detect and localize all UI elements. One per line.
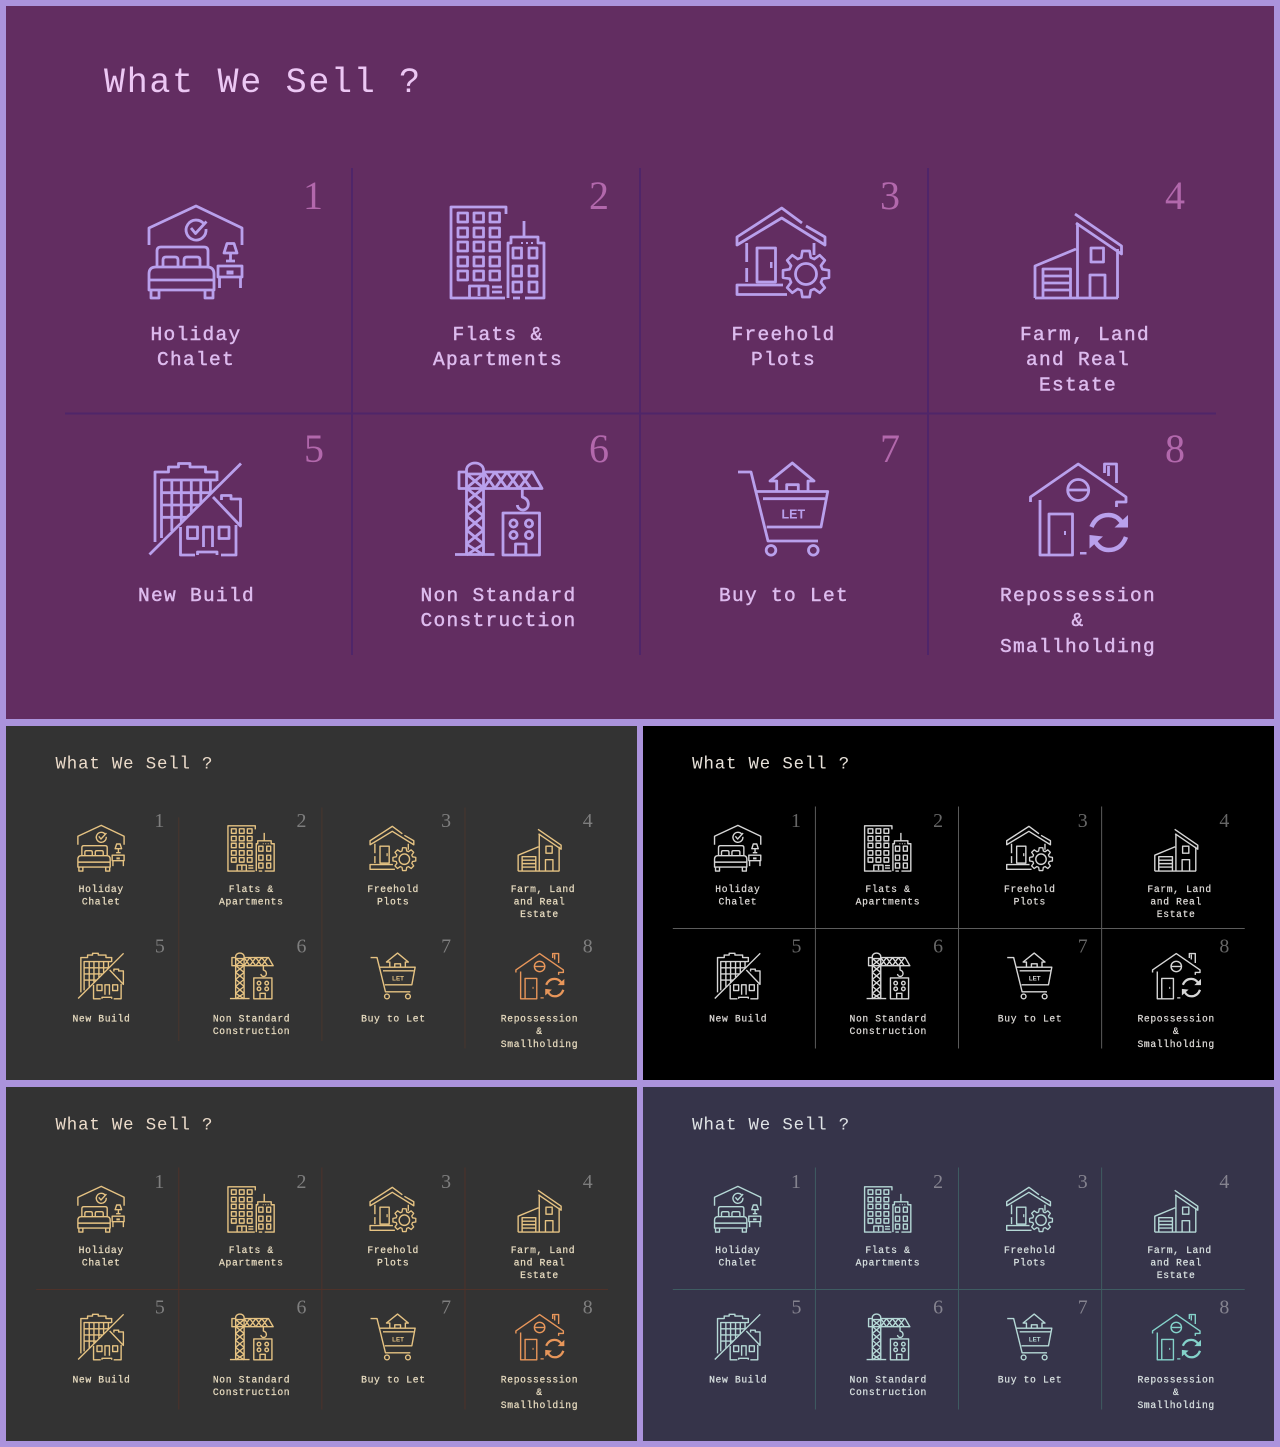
item 5: New Build: 5 [792, 1297, 802, 1319]
item 6: Non Standard Construction: Non Standard [420, 585, 577, 607]
item 8: Repossession & Smallholding: 8 [1219, 1297, 1229, 1319]
title: What We Sell ? [56, 756, 213, 775]
item 3: Freehold Plots: 3 [441, 810, 451, 832]
item 4: Farm, Land and Real Estate: Farm, Land [1147, 1245, 1212, 1256]
item 6: Non Standard Construction [850, 1297, 943, 1398]
item 8: Repossession & Smallholding: Repossession [1137, 1375, 1215, 1386]
item 2: Flats & Apartments: Apartments [219, 896, 284, 907]
item 2: Flats & Apartments: Apartments [856, 896, 920, 907]
item 6: Non Standard Construction [850, 936, 943, 1037]
item 5: New Build [72, 1297, 165, 1386]
item 8: Repossession & Smallholding [1137, 1297, 1229, 1411]
title: What We Sell ? [692, 756, 850, 775]
item 7: Buy to Let [719, 426, 900, 607]
item 3: Freehold Plots [1004, 810, 1088, 907]
item 5: New Build: 5 [155, 936, 165, 958]
item 4: Farm, Land and Real Estate: Estate [520, 909, 559, 920]
panel: charcoal slide, bottom left [6, 1087, 637, 1441]
item 4: Farm, Land and Real Estate: and Real [1150, 896, 1202, 907]
item 3: Freehold Plots: Freehold [1004, 884, 1056, 895]
item 7: Buy to Let: Buy to Let [361, 1375, 426, 1386]
item 6: Non Standard Construction [213, 936, 307, 1037]
item 6: Non Standard Construction: Non Standard [213, 1375, 290, 1386]
item 4: Farm, Land and Real Estate: Farm, Land [511, 884, 575, 895]
item 4: Farm, Land and Real Estate [1147, 1171, 1229, 1281]
panel: slate slide, bottom right [643, 1087, 1274, 1441]
item 1: Holiday Chalet: Chalet [82, 896, 121, 907]
item 6: Non Standard Construction: Construction [213, 1387, 290, 1398]
item 2: Flats & Apartments: Flats & [865, 1245, 911, 1256]
item 7: Buy to Let: 7 [1078, 936, 1088, 958]
item 4: Farm, Land and Real Estate: Farm, Land [511, 1245, 575, 1256]
item 6: Non Standard Construction: Construction [850, 1026, 927, 1037]
item 2: Flats & Apartments [856, 810, 943, 907]
item 5: New Build: 5 [792, 936, 802, 958]
item 7: Buy to Let: 7 [880, 426, 900, 471]
title: What We Sell ? [692, 1117, 850, 1136]
item 1: Holiday Chalet [78, 1171, 164, 1268]
item 5: New Build [709, 936, 802, 1025]
item 3: Freehold Plots [367, 810, 451, 907]
item 4: Farm, Land and Real Estate [1020, 173, 1185, 396]
panel: charcoal slide, top left [6, 726, 637, 1080]
item 7: Buy to Let [361, 936, 451, 1025]
item 8: Repossession & Smallholding: 8 [1219, 936, 1229, 958]
item 7: Buy to Let: Buy to Let [719, 585, 849, 607]
item 3: Freehold Plots [731, 173, 900, 371]
title: What We Sell ? [104, 63, 422, 103]
item 8: Repossession & Smallholding [501, 936, 593, 1050]
item 8: Repossession & Smallholding: 8 [583, 936, 593, 958]
item 3: Freehold Plots: Plots [377, 1257, 409, 1268]
item 2: Flats & Apartments: 2 [297, 1171, 306, 1193]
item 2: Flats & Apartments: Flats & [229, 1245, 274, 1256]
item 1: Holiday Chalet: Chalet [82, 1257, 121, 1268]
item 8: Repossession & Smallholding: Repossession [501, 1375, 578, 1386]
item 6: Non Standard Construction: Non Standard [213, 1014, 290, 1025]
item 6: Non Standard Construction: Non Standard [850, 1014, 927, 1025]
item 7: Buy to Let [998, 936, 1088, 1025]
item 1: Holiday Chalet [149, 173, 323, 371]
item 3: Freehold Plots: Freehold [731, 324, 836, 346]
item 2: Flats & Apartments: Apartments [856, 1257, 920, 1268]
item 5: New Build: New Build [72, 1014, 131, 1025]
item 8: Repossession & Smallholding: & [1173, 1026, 1179, 1037]
item 4: Farm, Land and Real Estate: Farm, Land [1020, 324, 1150, 346]
item 6: Non Standard Construction: Construction [213, 1026, 290, 1037]
item 3: Freehold Plots: 3 [1078, 810, 1088, 832]
item 1: Holiday Chalet: Chalet [719, 896, 757, 907]
item 4: Farm, Land and Real Estate [511, 1171, 593, 1281]
item 8: Repossession & Smallholding: & [536, 1387, 543, 1398]
item 3: Freehold Plots: Freehold [1004, 1245, 1056, 1256]
item 8: Repossession & Smallholding: & [1071, 610, 1085, 632]
item 5: New Build: 5 [155, 1297, 165, 1319]
item 4: Farm, Land and Real Estate: and Real [514, 896, 565, 907]
item 5: New Build [138, 426, 324, 607]
item 1: Holiday Chalet: Holiday [715, 884, 760, 895]
title: What We Sell ? [56, 1117, 213, 1136]
item 8: Repossession & Smallholding: Smallholding [1137, 1039, 1215, 1050]
item 5: New Build: New Build [709, 1014, 767, 1025]
item 4: Farm, Land and Real Estate: 4 [583, 810, 593, 832]
item 8: Repossession & Smallholding: Repossession [1000, 585, 1156, 607]
item 1: Holiday Chalet: Chalet [719, 1257, 757, 1268]
item 8: Repossession & Smallholding: Smallholding [1137, 1400, 1215, 1411]
item 4: Farm, Land and Real Estate: Estate [1157, 1270, 1196, 1281]
item 4: Farm, Land and Real Estate: Estate [1157, 909, 1196, 920]
item 4: Farm, Land and Real Estate: Farm, Land [1147, 884, 1212, 895]
item 4: Farm, Land and Real Estate: and Real [1150, 1257, 1202, 1268]
item 4: Farm, Land and Real Estate: 4 [1165, 173, 1185, 218]
item 4: Farm, Land and Real Estate: 4 [1219, 1171, 1229, 1193]
item 4: Farm, Land and Real Estate: and Real [1026, 349, 1130, 371]
item 2: Flats & Apartments: Apartments [219, 1257, 284, 1268]
panel: large purple slide [6, 6, 1274, 719]
item 8: Repossession & Smallholding: Smallholding [501, 1400, 578, 1411]
item 1: Holiday Chalet [78, 810, 164, 907]
item 6: Non Standard Construction [213, 1297, 307, 1398]
item 4: Farm, Land and Real Estate: 4 [583, 1171, 593, 1193]
item 1: Holiday Chalet: 1 [791, 1171, 801, 1193]
item 7: Buy to Let: 7 [441, 936, 451, 958]
item 7: Buy to Let: 7 [441, 1297, 451, 1319]
item 4: Farm, Land and Real Estate: Estate [520, 1270, 559, 1281]
item 5: New Build [72, 936, 165, 1025]
item 6: Non Standard Construction: Construction [420, 610, 577, 632]
item 1: Holiday Chalet: Holiday [79, 1245, 124, 1256]
item 4: Farm, Land and Real Estate: Estate [1039, 374, 1117, 396]
item 8: Repossession & Smallholding [1000, 426, 1185, 658]
item 7: Buy to Let: 7 [1078, 1297, 1088, 1319]
item 7: Buy to Let: Buy to Let [361, 1014, 426, 1025]
item 8: Repossession & Smallholding: & [1173, 1387, 1179, 1398]
item 6: Non Standard Construction: 6 [297, 1297, 307, 1319]
item 8: Repossession & Smallholding: 8 [1165, 426, 1185, 471]
item 2: Flats & Apartments: Flats & [452, 324, 544, 346]
item 6: Non Standard Construction: 6 [933, 1297, 943, 1319]
item 6: Non Standard Construction: Non Standard [850, 1375, 927, 1386]
item 4: Farm, Land and Real Estate: and Real [514, 1257, 565, 1268]
item 7: Buy to Let [361, 1297, 451, 1386]
item 2: Flats & Apartments: Flats & [229, 884, 274, 895]
item 4: Farm, Land and Real Estate: 4 [1219, 810, 1229, 832]
item 8: Repossession & Smallholding [1137, 936, 1229, 1050]
item 4: Farm, Land and Real Estate [511, 810, 593, 920]
item 3: Freehold Plots: 3 [880, 173, 900, 218]
item 6: Non Standard Construction: 6 [933, 936, 943, 958]
item 6: Non Standard Construction: Construction [850, 1387, 927, 1398]
item 2: Flats & Apartments [219, 810, 306, 907]
item 1: Holiday Chalet: 1 [791, 810, 801, 832]
item 8: Repossession & Smallholding: Smallholding [1000, 636, 1156, 658]
item 3: Freehold Plots: 3 [441, 1171, 451, 1193]
item 2: Flats & Apartments [856, 1171, 943, 1268]
item 3: Freehold Plots [367, 1171, 451, 1268]
item 8: Repossession & Smallholding: 8 [583, 1297, 593, 1319]
item 7: Buy to Let: Buy to Let [998, 1014, 1062, 1025]
item 1: Holiday Chalet: Holiday [79, 884, 124, 895]
item 5: New Build: New Build [709, 1375, 767, 1386]
item 3: Freehold Plots: Freehold [367, 1245, 419, 1256]
item 6: Non Standard Construction: 6 [297, 936, 307, 958]
item 5: New Build: New Build [72, 1375, 131, 1386]
item 3: Freehold Plots: Freehold [367, 884, 419, 895]
item 3: Freehold Plots: Plots [377, 896, 409, 907]
item 2: Flats & Apartments [433, 173, 609, 371]
item 5: New Build [709, 1297, 802, 1386]
item 2: Flats & Apartments: 2 [933, 810, 943, 832]
item 2: Flats & Apartments [219, 1171, 306, 1268]
item 2: Flats & Apartments: 2 [589, 173, 609, 218]
item 3: Freehold Plots: Plots [1014, 1257, 1046, 1268]
item 3: Freehold Plots: Plots [751, 349, 816, 371]
item 1: Holiday Chalet: Holiday [715, 1245, 760, 1256]
item 3: Freehold Plots: Plots [1014, 896, 1046, 907]
item 1: Holiday Chalet: 1 [154, 810, 164, 832]
item 2: Flats & Apartments: Apartments [433, 349, 563, 371]
item 8: Repossession & Smallholding: & [536, 1026, 543, 1037]
item 8: Repossession & Smallholding: Repossession [1137, 1014, 1215, 1025]
item 4: Farm, Land and Real Estate [1147, 810, 1229, 920]
item 1: Holiday Chalet: Chalet [157, 349, 235, 371]
item 2: Flats & Apartments: 2 [297, 810, 306, 832]
item 3: Freehold Plots [1004, 1171, 1088, 1268]
item 6: Non Standard Construction: 6 [589, 426, 609, 471]
item 3: Freehold Plots: 3 [1078, 1171, 1088, 1193]
item 5: New Build: New Build [138, 585, 255, 607]
item 8: Repossession & Smallholding [501, 1297, 593, 1411]
item 1: Holiday Chalet [715, 810, 801, 907]
item 8: Repossession & Smallholding: Smallholding [501, 1039, 578, 1050]
item 5: New Build: 5 [304, 426, 324, 471]
item 8: Repossession & Smallholding: Repossession [501, 1014, 578, 1025]
item 1: Holiday Chalet: 1 [154, 1171, 164, 1193]
item 1: Holiday Chalet [715, 1171, 801, 1268]
item 1: Holiday Chalet: 1 [303, 173, 323, 218]
item 7: Buy to Let [998, 1297, 1088, 1386]
item 2: Flats & Apartments: Flats & [865, 884, 911, 895]
item 7: Buy to Let: Buy to Let [998, 1375, 1062, 1386]
item 2: Flats & Apartments: 2 [933, 1171, 943, 1193]
item 6: Non Standard Construction [420, 426, 609, 632]
panel: black slide, top right [643, 726, 1274, 1080]
item 1: Holiday Chalet: Holiday [150, 324, 242, 346]
